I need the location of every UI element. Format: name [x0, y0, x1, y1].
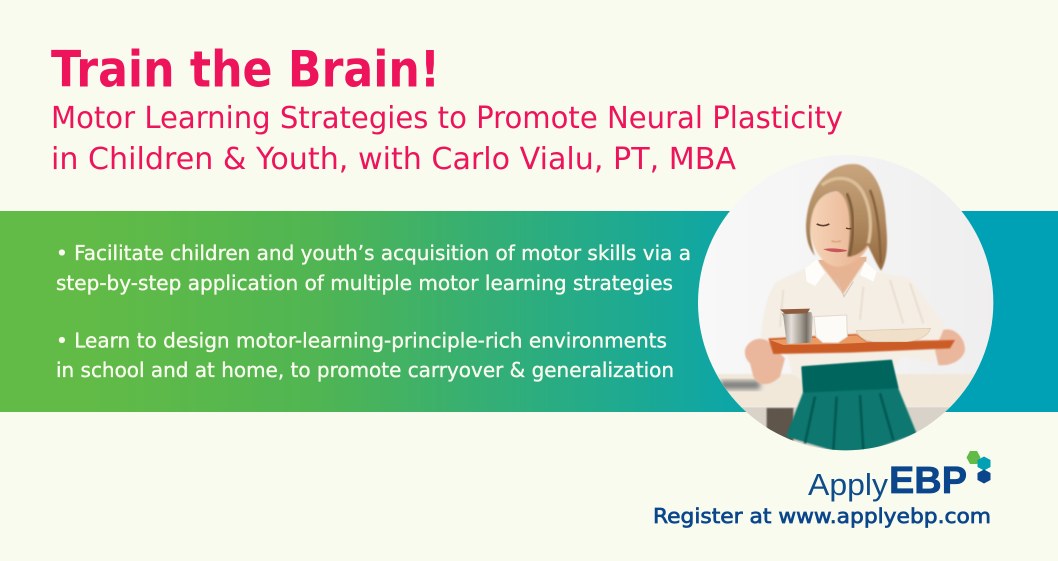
subtitle: in Children & Youth, with Carlo Vialu, PT, MBA — [51, 142, 736, 177]
eyes, nose and mouth — [817, 224, 829, 226]
bullet points: • Facilitate children and youth’s acquisition of motor skills via a — [56, 241, 691, 265]
subtitle: Motor Learning Strategies to Promote Neural Plasticity — [51, 101, 843, 136]
tray — [768, 334, 955, 354]
arms and hands — [745, 339, 785, 384]
icon: hexagons — [966, 451, 990, 484]
logo: ApplyEBP: Apply — [808, 467, 889, 502]
title: Train the Brain! — [51, 40, 440, 98]
bullet points: • Learn to design motor-learning-principle-rich environments — [56, 328, 667, 352]
bullet points: step-by-step application of multiple motor learning strategies — [56, 271, 673, 295]
subtitle — [51, 101, 843, 177]
gradient band — [0, 211, 1058, 412]
cup — [814, 315, 847, 343]
face — [810, 192, 872, 267]
hair — [806, 164, 887, 271]
jug — [782, 312, 813, 344]
logo: ApplyEBP — [808, 451, 990, 502]
bullet points — [56, 241, 691, 382]
photo: girl carrying a tray — [690, 150, 1000, 460]
registration line: Register at www.applyebp.com — [653, 504, 991, 528]
logo: ApplyEBP: EBP — [889, 460, 967, 502]
bullet points: in school and at home, to promote carryover & generalization — [56, 358, 674, 382]
shirt — [761, 259, 945, 380]
bowl — [856, 328, 931, 342]
skirt — [786, 360, 917, 452]
neck — [818, 257, 867, 297]
